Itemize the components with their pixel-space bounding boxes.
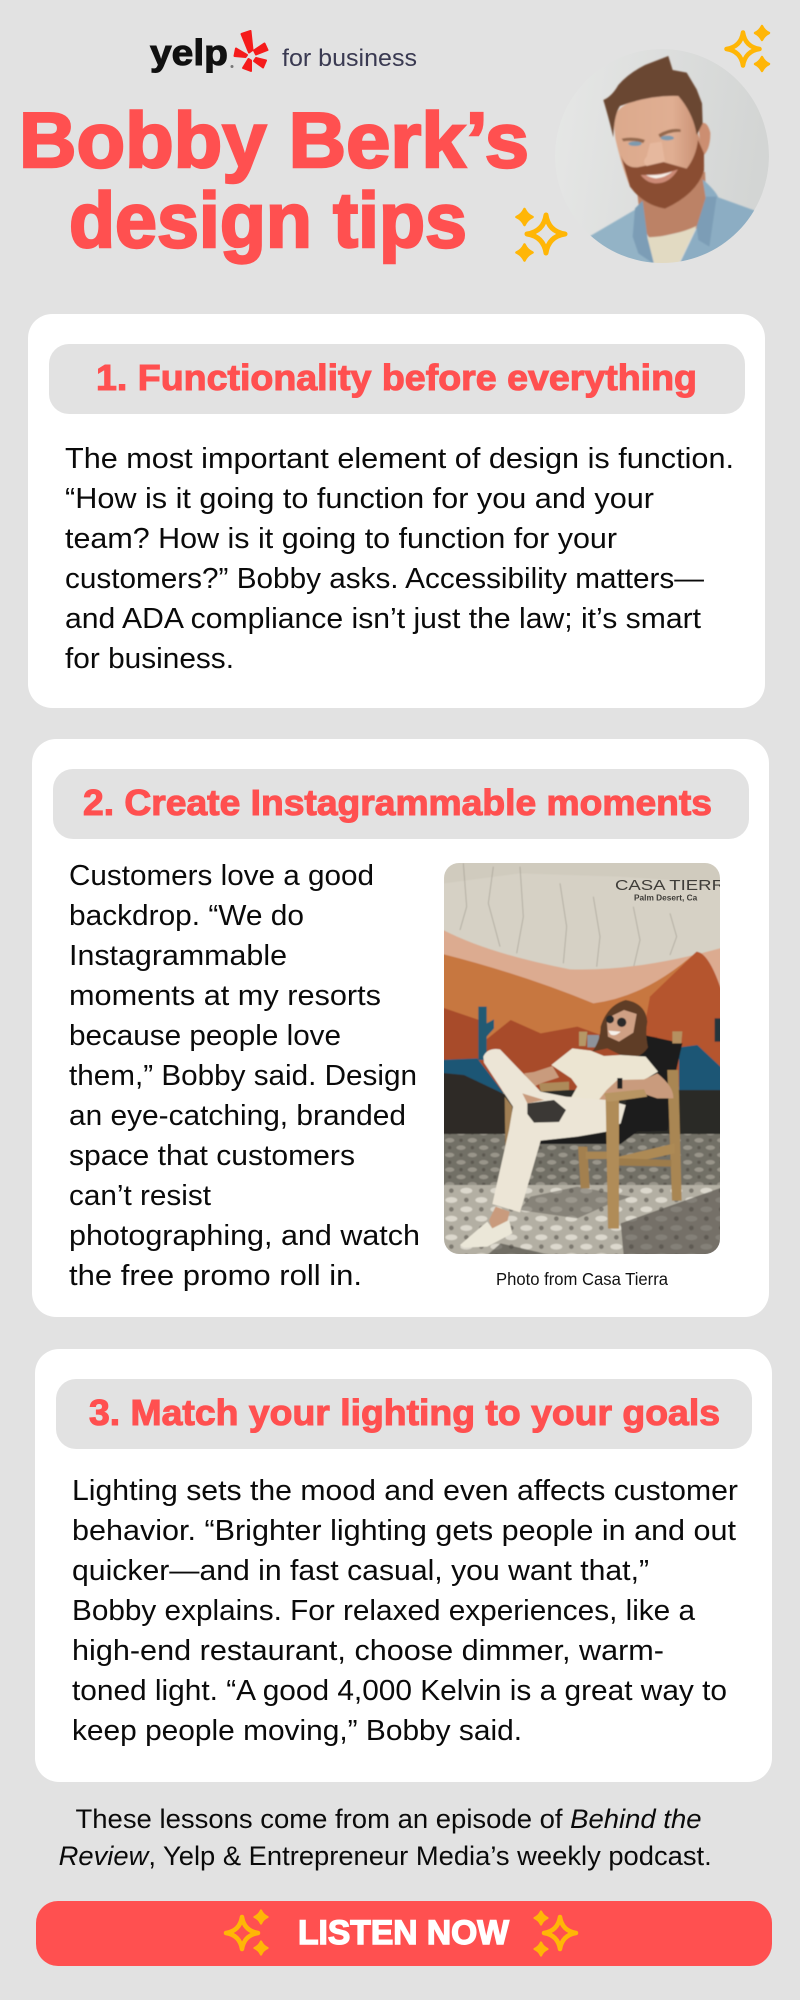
body text: tip 2: because people love [69,1020,341,1052]
logo: yelp for business [150,31,417,73]
neck [637,172,707,239]
body text: tip 2: space that customers [69,1140,355,1172]
woman: hair and head [592,1000,648,1058]
heading pill: tip 3: 3. Match your lighting to your goals [89,1392,720,1433]
panel: tip 2 [32,739,769,1317]
photo caption: Photo from Casa Tierra [496,1269,668,1289]
heading pill: tip 1: 1. Functionality before everything [96,357,697,398]
for business label: for business [282,45,417,72]
body text: tip 2: an eye-catching, branded [69,1100,406,1132]
body text: tip 2: can’t resist [69,1180,211,1212]
mural sign text [616,880,720,902]
body text: tip 3: toned light. “A good 4,000 Kelvin is a great way to [72,1675,727,1707]
mural bands [444,930,720,1004]
denim shirt [590,210,652,262]
footer text: These lessons come from an episode of Behind the [76,1804,702,1834]
nose shade [644,142,665,166]
woman: right arm [599,1072,674,1100]
body text: tip 3: keep people moving,” Bobby said. [72,1715,522,1747]
floor [440,1134,724,1187]
mural sign text: CASA TIERR [615,878,725,894]
body text: tip 1: “How is it going to function for you and your [65,483,654,515]
footer text [59,1804,712,1871]
mouth [641,169,678,183]
body text: tip 2: moments at my resorts [69,980,381,1012]
body text: tip 2: Instagrammable [69,940,287,972]
body text: tip 2: photographing, and watch [69,1220,420,1252]
button: listen now: LISTEN NOW [298,1914,510,1952]
icon: sparkles top right [726,26,769,71]
face [614,95,701,184]
icon: yelp burst [234,31,268,71]
body text: tip 2: backdrop. “We do [69,900,304,932]
button: listen now [36,1901,772,1966]
body text: tip 1: The most important element of design is function. [65,443,734,475]
body text: tip 1: team? How is it going to function for your [65,523,617,555]
icon: sparkles beside title [516,209,565,260]
body text: tip 1 [65,443,734,675]
woman: left arm [524,1066,559,1087]
body text: tip 3: quicker—and in fast casual, you want that,” [72,1555,649,1587]
heading pill: tip 1 [49,344,745,414]
body text: tip 3: high-end restaurant, choose dimmer, warm- [72,1635,664,1667]
body text: tip 3: behavior. “Brighter lighting gets people in and out [72,1515,736,1547]
woman: foot [489,1207,510,1231]
body text: tip 2: the free promo roll in. [69,1260,362,1292]
panel: tip 3 [35,1349,772,1782]
panel: tip 1 [28,314,765,708]
woman: top [550,1048,659,1100]
body text: tip 3: Lighting sets the mood and even affects customer [72,1475,738,1507]
body text: tip 1: for business. [65,643,234,675]
woman: trousers [483,1049,626,1212]
chair front [606,1093,619,1229]
body text: tip 3 [72,1475,738,1747]
heading pill: tip 2: 2. Create Instagrammable moments [83,782,712,823]
body text: tip 2: them,” Bobby said. Design [69,1060,417,1092]
heading pill: tip 3 [56,1379,752,1449]
photo: woman in chair at Casa Tierra [440,860,725,1258]
beard [621,140,704,209]
body text: tip 2: Customers love a good [69,860,374,892]
body text: tip 1: customers?” Bobby asks. Accessibility matters— [65,563,704,595]
yelp wordmark: yelp [150,32,228,73]
wall cracks [460,863,678,967]
title: design tips [69,176,467,264]
mural sign text: Palm Desert, Ca [634,894,698,903]
heading pill: tip 2 [53,769,749,839]
title: Bobby Berk’s [19,96,529,184]
ear [698,123,710,157]
title [19,96,529,264]
portrait: Bobby Berk [590,54,769,263]
body text: tip 1: and ADA compliance isn’t just the law; it’s smart [65,603,701,635]
body text: tip 3: Bobby explains. For relaxed experiences, like a [72,1595,696,1627]
brows and eyes [622,138,645,143]
body text: tip 2 [69,860,420,1292]
footer text: Review, Yelp & Entrepreneur Media’s weekly podcast. [59,1841,712,1871]
icon: sparkles right of button text [534,1912,576,1956]
lower mural [444,1008,620,1091]
chair [539,1035,682,1144]
hair [603,56,703,137]
icon: sparkles left of button text [226,1910,268,1954]
woman: shin and shoe [522,1093,544,1103]
tee [647,226,697,267]
